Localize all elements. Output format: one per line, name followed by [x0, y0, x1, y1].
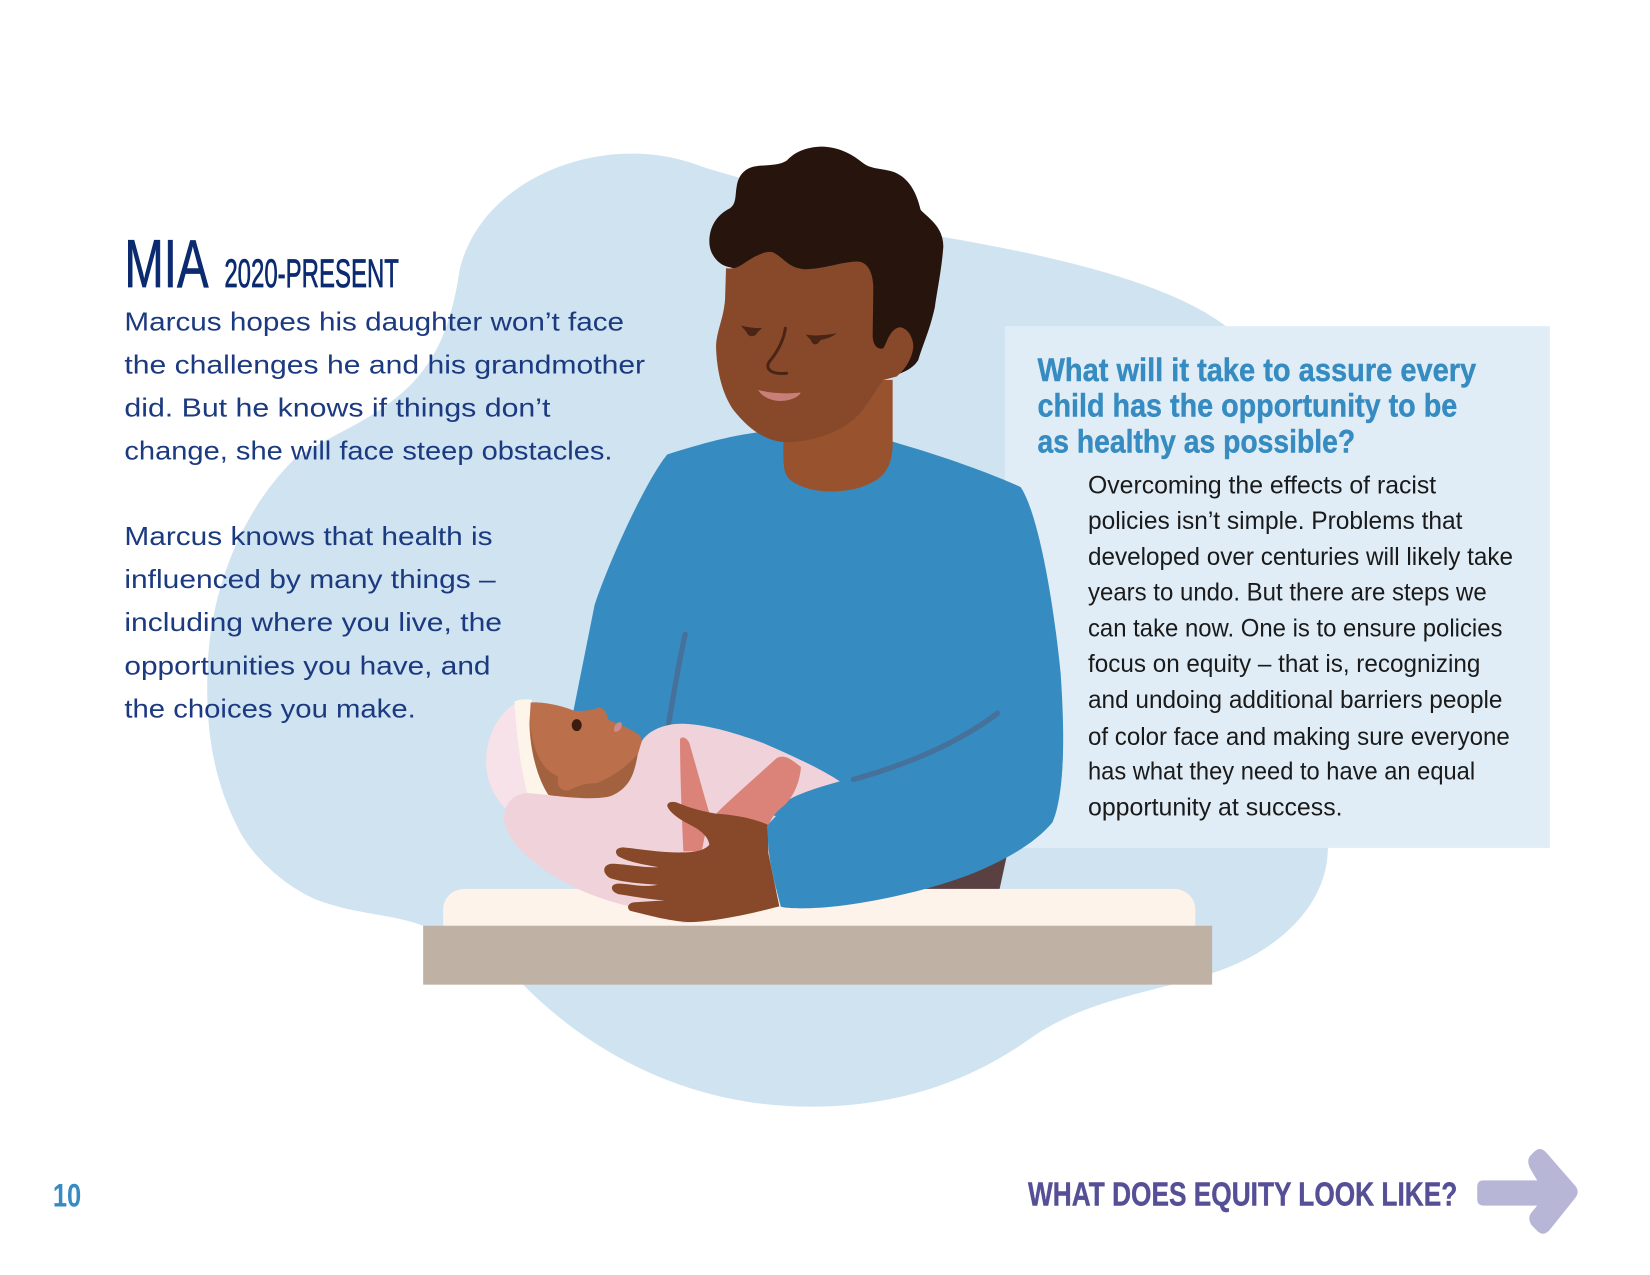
table	[423, 926, 1212, 985]
question heading: What will it take to assure every	[1038, 351, 1476, 388]
head	[709, 147, 943, 492]
question heading	[1038, 351, 1476, 459]
text block: health influences: Marcus knows that health is	[124, 523, 493, 551]
background blob	[207, 154, 1328, 1107]
pants	[905, 850, 1008, 889]
baby shade	[530, 720, 638, 799]
answer body text: focus on equity – that is, recognizing	[1088, 650, 1480, 678]
shirt body	[568, 431, 1063, 842]
illustration: father holding baby	[423, 147, 1212, 985]
page number: 10	[53, 1177, 81, 1214]
baby nose	[614, 722, 622, 732]
answer body text: and undoing additional barriers people	[1088, 686, 1502, 714]
answer body text: Overcoming the effects of racist	[1088, 471, 1436, 499]
mouth	[758, 390, 801, 401]
answer body text: opportunity at success.	[1088, 793, 1343, 821]
text block: health influences: opportunities you have, and	[124, 652, 490, 680]
text block: health influences: influenced by many things –	[124, 566, 497, 594]
blanket	[504, 724, 840, 923]
text block: health influences: the choices you make.	[124, 695, 416, 723]
question heading: as healthy as possible?	[1038, 422, 1355, 459]
left eye	[741, 326, 762, 336]
answer body text	[1088, 471, 1513, 821]
text block: marcus hopes: change, she will face steep obstacles.	[124, 438, 612, 466]
next link label: WHAT DOES EQUITY LOOK LIKE?	[1028, 1177, 1457, 1214]
face	[716, 252, 913, 442]
text block: marcus hopes	[124, 308, 646, 466]
answer body text: years to undo. But there are steps we	[1088, 579, 1487, 607]
cushion	[443, 889, 1195, 927]
right eye	[806, 333, 837, 344]
text block: health influences: including where you live, the	[124, 609, 502, 637]
answer body text: policies isn’t simple. Problems that	[1088, 507, 1463, 535]
hair	[709, 147, 943, 375]
neck	[783, 380, 893, 492]
answer body text: of color face and making sure everyone	[1088, 723, 1510, 751]
blanket salmon fold	[680, 737, 709, 851]
text block: health influences	[124, 523, 502, 723]
question heading: child has the opportunity to be	[1038, 387, 1457, 424]
hand	[604, 802, 779, 922]
blanket salmon arm	[717, 757, 801, 826]
icon: next arrow	[1477, 1149, 1578, 1234]
baby and hand	[486, 699, 840, 923]
nose	[768, 328, 787, 373]
title: MIA	[124, 227, 209, 302]
hood band	[514, 699, 548, 795]
text block: marcus hopes: Marcus hopes his daughter won’t face	[124, 308, 624, 336]
answer body text: developed over centuries will likely take	[1088, 543, 1513, 571]
shirt crease	[668, 634, 685, 726]
forearm sleeve	[768, 712, 1063, 908]
baby face	[529, 702, 641, 799]
text block: marcus hopes: the challenges he and his grandmother	[124, 351, 646, 379]
arm crease	[853, 713, 998, 780]
baby hood	[486, 703, 550, 808]
title: 2020-PRESENT	[224, 252, 399, 296]
text block: marcus hopes: did. But he knows if things don’t	[124, 395, 550, 423]
panel: question box	[1005, 326, 1550, 848]
baby eye	[572, 719, 582, 731]
answer body text: has what they need to have an equal	[1088, 758, 1475, 786]
answer body text: can take now. One is to ensure policies	[1088, 614, 1502, 642]
